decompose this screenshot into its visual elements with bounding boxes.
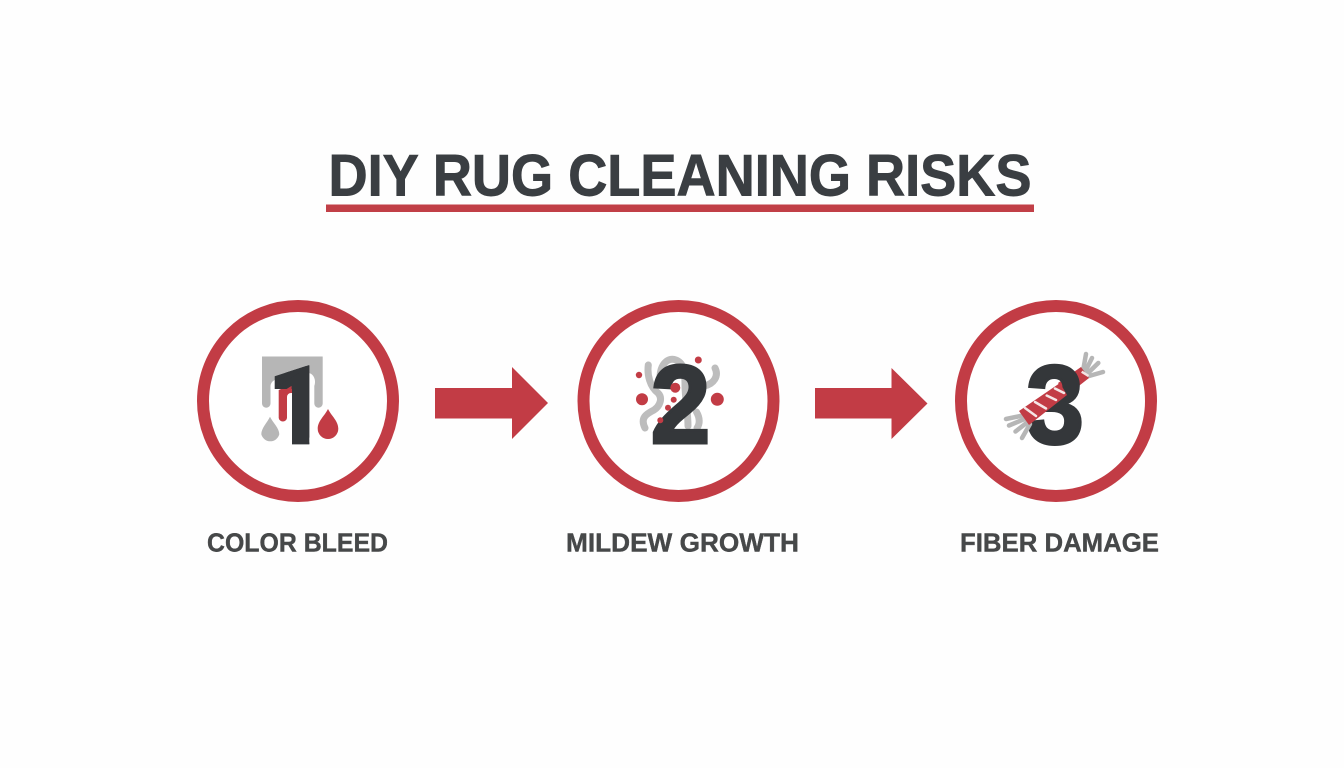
circle badge 3 — [961, 306, 1151, 496]
icon: frayed rope back section — [1058, 354, 1103, 396]
label: fiber damage: FIBER DAMAGE — [960, 528, 1159, 558]
arrow 2 — [815, 368, 928, 439]
icon: mildew spores — [636, 356, 724, 423]
infographic — [197, 154, 1158, 552]
label: color bleed: COLOR BLEED — [207, 528, 388, 558]
panel: mildew growth — [566, 306, 799, 558]
icon: mildew tendrils — [643, 359, 716, 428]
number 3: 3 — [1026, 344, 1084, 468]
icon: dripping paint — [261, 356, 338, 441]
label: mildew growth: MILDEW GROWTH — [566, 528, 799, 558]
circle badge 1 — [203, 306, 393, 496]
number 2: 2 — [650, 343, 710, 467]
title: DIY RUG CLEANING RISKS — [328, 144, 1032, 208]
panel: color bleed — [203, 306, 393, 558]
icon: frayed rope front section — [1006, 383, 1067, 438]
arrow 1 — [435, 367, 548, 439]
panel: fiber damage — [960, 306, 1159, 558]
number 1: 1 — [268, 341, 333, 471]
circle badge 2 — [584, 306, 774, 496]
